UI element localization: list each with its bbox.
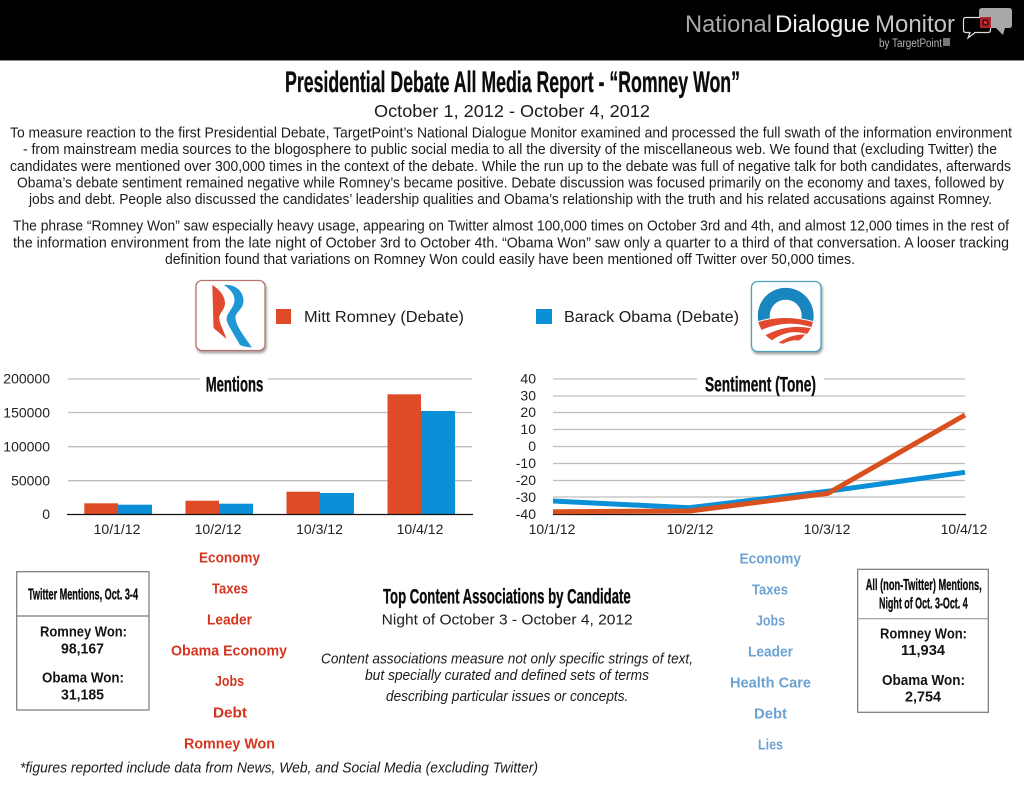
- second paragraph: [13, 218, 1010, 268]
- y axis labels: -30: [516, 489, 536, 505]
- y axis labels: -10: [516, 455, 536, 471]
- x axis labels: [94, 521, 444, 537]
- y axis labels: 200000: [3, 370, 50, 386]
- note: content associations: Content associations measure not only specific strings of text,: [321, 651, 693, 667]
- x axis labels: 10/2/12: [667, 521, 714, 537]
- list: Romney associations: Leader: [207, 611, 252, 628]
- y axis labels: 0: [528, 438, 536, 454]
- heading: top content associations: [382, 585, 633, 628]
- note: content associations: but specially curated and defined sets of terms: [365, 668, 649, 684]
- y axis labels: 40: [520, 370, 536, 386]
- line: Romney: [553, 415, 965, 512]
- brand byline: by TargetPoint: [879, 38, 943, 50]
- y axis labels: [516, 370, 536, 522]
- intro paragraph: - from mainstream media sources to the blogosphere to public social media to all the diversity of the miscellaneous web. We found that (excluding Twitter) the: [23, 142, 997, 158]
- y axis labels: -40: [516, 506, 536, 522]
- list: Obama associations: Lies: [758, 736, 783, 753]
- panel: Twitter mentions: Romney Won:: [40, 625, 127, 641]
- intro paragraph: Obama’s debate sentiment remained negative while Romney’s became positive. Debate discussion was focused primarily on the economy and taxes, followed by: [17, 176, 1005, 192]
- footnote: *figures reported include data from News, Web, and Social Media (excluding Twitter): [20, 761, 538, 777]
- y axis labels: 10: [520, 421, 536, 437]
- intro paragraph: jobs and debt. People also discussed the candidates’ leadership qualities and Obama’s relationship with the truth and his related accusations against Romney.: [28, 192, 992, 208]
- legend: Mitt Romney: Mitt Romney (Debate): [304, 309, 464, 326]
- list: Obama associations: Leader: [748, 643, 793, 660]
- x axis labels: [529, 521, 988, 537]
- x axis labels: 10/4/12: [941, 521, 988, 537]
- list: Romney associations: Debt: [213, 704, 247, 721]
- line: Obama: [553, 472, 965, 508]
- icon: Obama logo: [752, 282, 821, 352]
- second paragraph: the information environment from the late night of October 3rd to October 4th. “Obama Won” saw only a quarter to a third of that conversation. A looser tracking: [13, 236, 1009, 252]
- x axis labels: 10/1/12: [529, 521, 576, 537]
- legend: [276, 309, 739, 326]
- brand name: National Dialogue Monitor: Dialogue: [775, 11, 870, 38]
- panel: non-Twitter mentions: 11,934: [901, 643, 945, 659]
- chart title: Sentiment: [697, 372, 824, 397]
- y axis labels: 20: [520, 404, 536, 420]
- brand name: National Dialogue Monitor: National: [685, 11, 772, 38]
- list: Romney associations: Jobs: [215, 673, 244, 690]
- list: Obama associations: Taxes: [752, 581, 788, 598]
- list: Romney associations: Romney Won: [184, 735, 275, 752]
- icon: Romney logo: [196, 280, 265, 350]
- x axis labels: 10/2/12: [195, 521, 242, 537]
- list: Obama associations: Jobs: [756, 612, 785, 629]
- panel: non-Twitter mentions: Romney Won:: [880, 626, 967, 642]
- y axis labels: 50000: [11, 472, 50, 488]
- legend: Barack Obama: Barack Obama (Debate): [564, 309, 739, 326]
- list: Romney associations: Obama Economy: [171, 642, 288, 659]
- x axis labels: 10/3/12: [296, 521, 343, 537]
- chart title: Mentions: Mentions: [206, 374, 263, 397]
- x axis labels: 10/3/12: [804, 521, 851, 537]
- y axis labels: [3, 370, 50, 522]
- intro paragraph: [10, 126, 1012, 208]
- y axis labels: 150000: [3, 404, 50, 420]
- list: Romney associations: [171, 549, 288, 752]
- list: Obama associations: Health Care: [730, 674, 811, 691]
- list: Obama associations: Debt: [754, 705, 787, 722]
- panel: Twitter mentions: Obama Won:: [42, 671, 124, 687]
- panel: Twitter mentions: 31,185: [61, 687, 104, 703]
- panel: Twitter mentions: [17, 572, 149, 710]
- header banner: [0, 0, 1024, 61]
- y axis labels: -20: [516, 472, 536, 488]
- heading: top content associations: Top Content Associations by Candidate: [383, 585, 631, 608]
- panel: non-Twitter mentions: [858, 569, 988, 712]
- brand name: National Dialogue Monitor: Monitor: [875, 11, 955, 38]
- brand name: National Dialogue Monitor: [685, 11, 955, 38]
- bars: Obama: [118, 411, 455, 514]
- list: Obama associations: [730, 550, 811, 753]
- date range: October 1, 2012 - October 4, 2012: [374, 101, 650, 121]
- x axis labels: 10/4/12: [397, 521, 444, 537]
- panel: Twitter mentions: 98,167: [61, 641, 104, 657]
- list: Obama associations: Economy: [740, 550, 802, 567]
- list: Romney associations: Taxes: [212, 580, 248, 597]
- note: content associations: [321, 651, 693, 705]
- panel: non-Twitter mentions: 2,754: [905, 690, 941, 706]
- chart title: Sentiment: Sentiment (Tone): [705, 374, 816, 397]
- y axis labels: 100000: [3, 438, 50, 454]
- panel: non-Twitter mentions: Obama Won:: [882, 673, 965, 689]
- note: content associations: describing particular issues or concepts.: [386, 689, 628, 705]
- y axis labels: 0: [42, 506, 50, 522]
- icon: chat bubbles: [964, 8, 1012, 38]
- panel: Twitter mentions: Twitter Mentions, Oct. 3-4: [28, 586, 138, 603]
- x axis labels: 10/1/12: [94, 521, 141, 537]
- line chart: sentiment: [516, 370, 988, 537]
- intro paragraph: candidates were mentioned over 300,000 times in the context of the debate. While the run up to the debate was full of negative talk for both candidates, afterwards: [10, 159, 1011, 175]
- y axis labels: 30: [520, 388, 536, 404]
- bars: Romney: [84, 394, 421, 514]
- list: Romney associations: Economy: [199, 549, 261, 566]
- chart title: Mentions: [200, 372, 268, 397]
- heading: top content associations: Night of October 3 - October 4, 2012: [382, 611, 633, 628]
- bar chart: mentions: [3, 370, 473, 537]
- second paragraph: definition found that variations on Romney Won could easily have been mentioned off Twitter over 50,000 times.: [165, 252, 855, 268]
